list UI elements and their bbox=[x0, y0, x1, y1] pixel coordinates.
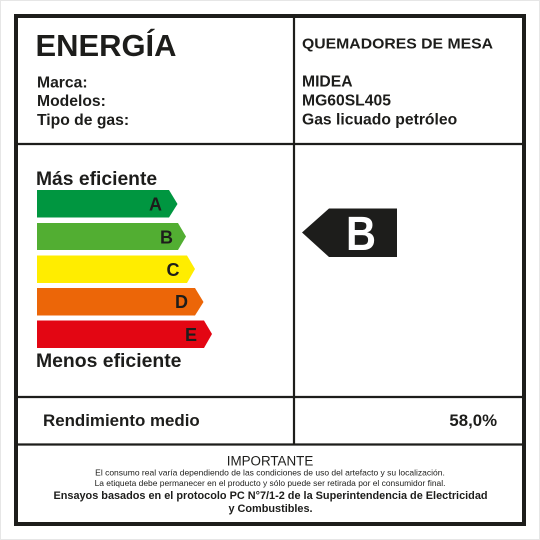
heading: menos eficiente: Menos eficiente bbox=[36, 350, 182, 372]
title: ENERGÍA bbox=[36, 28, 176, 63]
field labels bbox=[37, 74, 129, 129]
field values bbox=[302, 74, 457, 128]
efficiency scale bbox=[37, 190, 212, 348]
important notice: Ensayos basados en el protocolo PC N°7/1-2 de la Superintendencia de Electricidad bbox=[53, 490, 488, 502]
bar D: D bbox=[175, 292, 188, 312]
field labels: Modelos: bbox=[37, 93, 106, 110]
bar D bbox=[37, 288, 204, 316]
bar C: C bbox=[166, 260, 180, 280]
important notice bbox=[53, 454, 488, 515]
bar A: A bbox=[149, 195, 162, 215]
field labels: Marca: bbox=[37, 74, 88, 92]
product heading: QUEMADORES DE MESA bbox=[302, 35, 493, 52]
important notice: La etiqueta debe permanecer en el producto y sólo puede ser retirada por el consumidor final. bbox=[95, 478, 445, 488]
bar B: B bbox=[160, 227, 173, 247]
field values: Gas licuado petróleo bbox=[302, 111, 457, 128]
field values: MIDEA bbox=[302, 74, 353, 91]
bar C bbox=[37, 256, 195, 283]
field labels: Tipo de gas: bbox=[37, 112, 129, 129]
bar A bbox=[37, 190, 178, 218]
bar E bbox=[37, 320, 212, 348]
heading: más eficiente: Más eficiente bbox=[36, 169, 157, 190]
average performance label: Rendimiento medio bbox=[43, 411, 200, 430]
field values: MG60SL405 bbox=[302, 93, 391, 110]
bar E: E bbox=[185, 325, 197, 345]
important notice: y Combustibles. bbox=[228, 503, 313, 515]
rating arrow B: B bbox=[346, 208, 376, 261]
important notice: IMPORTANTE bbox=[227, 454, 313, 468]
average performance value: 58,0% bbox=[449, 411, 497, 430]
rating arrow B bbox=[302, 208, 397, 261]
bar B bbox=[37, 223, 186, 250]
important notice: El consumo real varía dependiendo de las condiciones de uso del artefacto y su localización. bbox=[95, 468, 445, 478]
